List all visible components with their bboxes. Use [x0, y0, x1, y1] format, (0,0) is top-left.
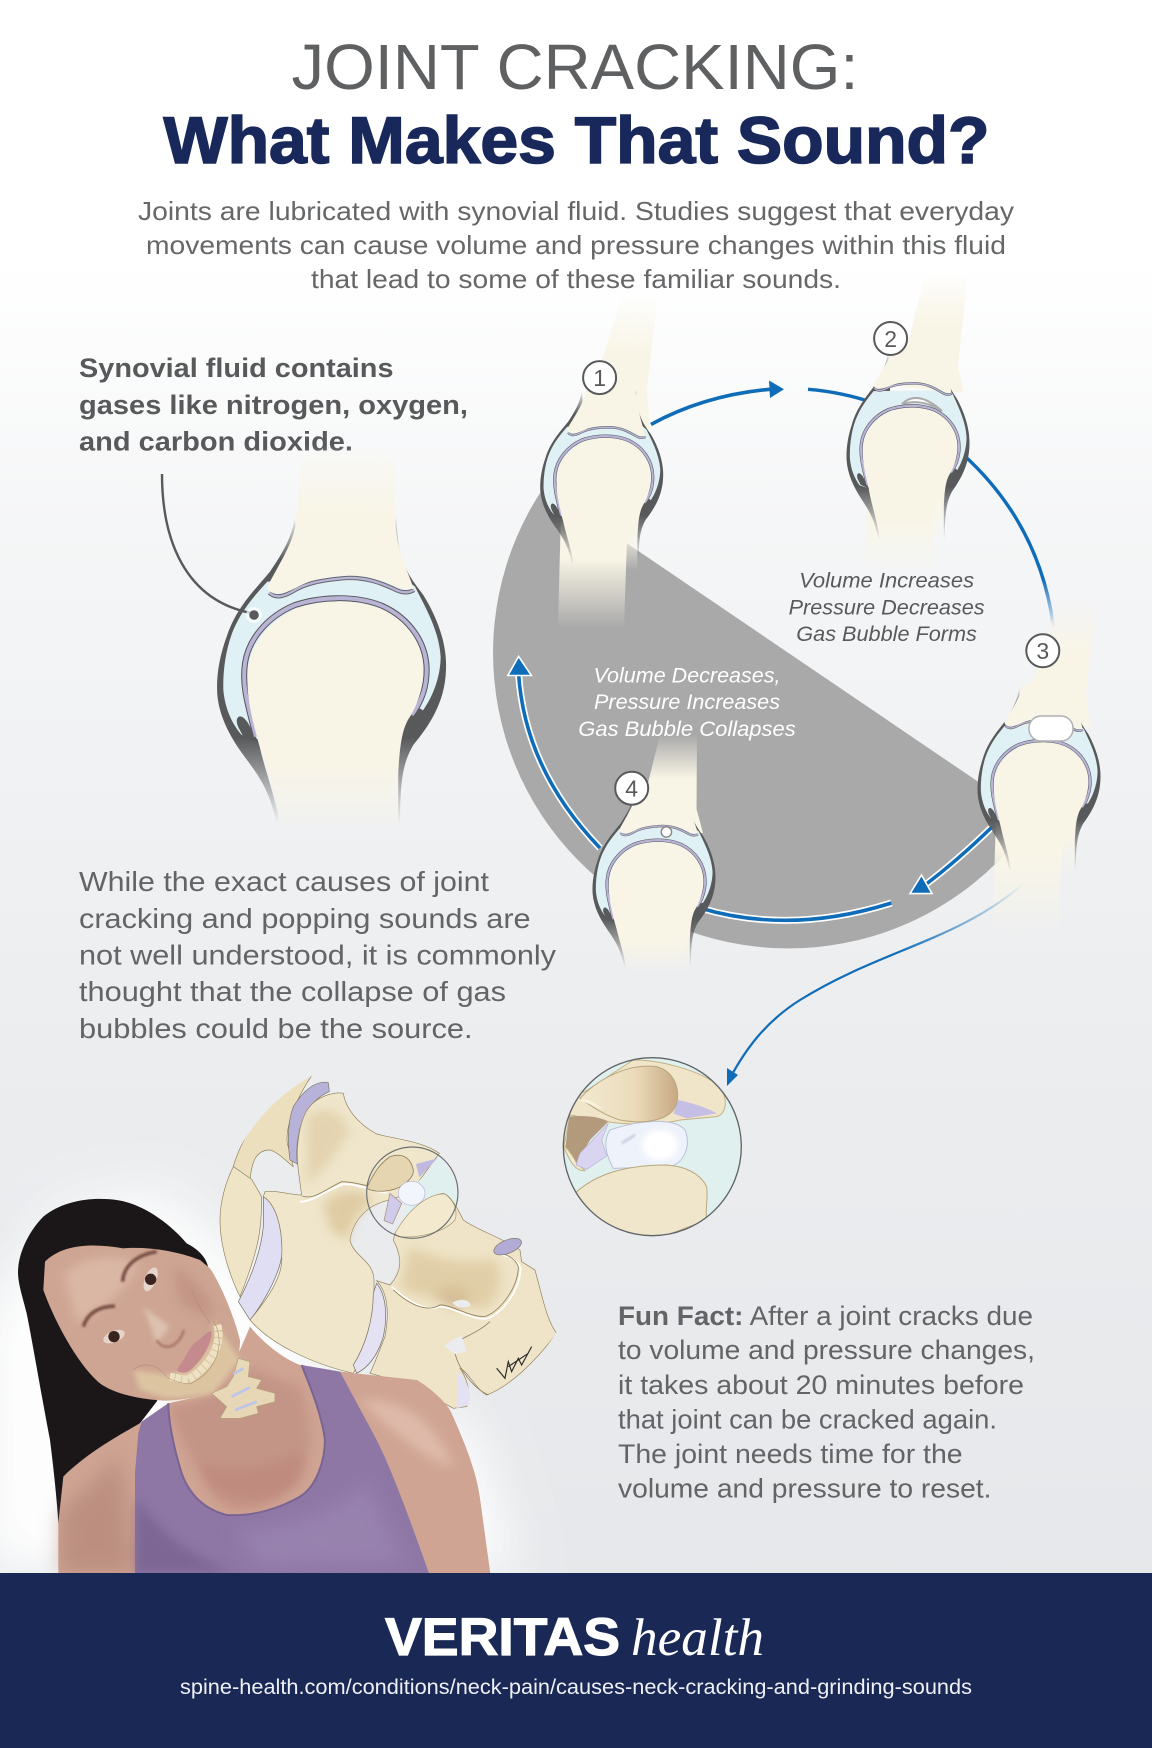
fun fact: Fun Fact: After a joint cracks due: [618, 1301, 1033, 1331]
artist signature: [497, 1347, 532, 1378]
cervical vertebrae: [212, 1358, 275, 1418]
explanation paragraph: While the exact causes of joint: [79, 866, 489, 897]
eyebrows: [83, 1252, 157, 1327]
caption: volume decreases: Gas Bubble Collapses: [578, 718, 796, 741]
intro text: movements can cause volume and pressure changes within this fluid: [146, 230, 1006, 260]
caption: volume decreases: [578, 664, 796, 741]
caption: volume increases: [789, 570, 985, 646]
teeth: [170, 1325, 219, 1379]
arrow: 1 to 2: [651, 380, 784, 424]
title: [164, 31, 990, 177]
nose: [157, 1330, 184, 1347]
central vertebra: [250, 1093, 439, 1373]
step number 2: 2: [884, 326, 897, 352]
jaw bone overlay: [133, 1320, 240, 1398]
step number 3: [1026, 634, 1059, 667]
fun fact: that joint can be cracked again.: [618, 1404, 997, 1434]
fun fact: The joint needs time for the: [618, 1439, 963, 1469]
title: JOINT CRACKING:: [292, 31, 858, 103]
explanation paragraph: [79, 866, 556, 1044]
arrow: joint 3 to magnified view: [727, 883, 1024, 1086]
fun fact: volume and pressure to reset.: [618, 1474, 992, 1504]
step number 1: [583, 361, 616, 394]
explanation paragraph: cracking and popping sounds are: [79, 903, 531, 934]
synovial fluid heading: gases like nitrogen, oxygen,: [79, 390, 468, 420]
socket: [367, 1155, 413, 1191]
intro text: that lead to some of these familiar sounds.: [311, 264, 841, 294]
step number 2: [874, 322, 907, 355]
step number 1: 1: [593, 365, 606, 391]
logo: VERITAS: [385, 1608, 620, 1667]
hair: [18, 1199, 208, 1523]
caption: volume decreases: Pressure Increases: [594, 691, 781, 714]
disc 1: [288, 1082, 329, 1164]
title: What Makes That Sound?: [164, 103, 990, 177]
logo: health: [631, 1609, 764, 1667]
synovial fluid heading: Synovial fluid contains: [79, 353, 393, 383]
caption: volume decreases: Volume Decreases,: [594, 664, 780, 688]
explanation paragraph: thought that the collapse of gas: [79, 976, 506, 1007]
caption: volume increases: Pressure Decreases: [789, 596, 985, 620]
large joint diagram: [217, 445, 446, 833]
lips: [177, 1331, 212, 1373]
explanation paragraph: bubbles could be the source.: [79, 1013, 473, 1044]
right vertebra shading: [433, 1285, 473, 1308]
arrow: 2 to 3: [808, 389, 1054, 627]
disc 3: [353, 1283, 386, 1373]
joint 2: [846, 270, 970, 574]
step number 3: 3: [1036, 638, 1049, 664]
arrow: 3 to 4: [700, 827, 992, 920]
tank top: [135, 1365, 429, 1573]
body skin: [58, 1327, 490, 1573]
upper facet in ring: [395, 1194, 456, 1237]
grey cycle semicircle: [493, 487, 1033, 948]
disc 5: [457, 1372, 470, 1408]
fun fact: [618, 1301, 1035, 1504]
arrow: 4 to 1: [508, 656, 600, 848]
left column bone: [220, 1167, 262, 1297]
intro text: [138, 196, 1014, 294]
disc 4: [494, 1238, 522, 1256]
intro text: Joints are lubricated with synovial fluid. Studies suggest that everyday: [138, 196, 1014, 226]
woman with neck x-ray: [0, 1180, 490, 1573]
disc 2: [238, 1197, 282, 1320]
right vertebra: [370, 1193, 557, 1408]
eyes: [101, 1265, 161, 1346]
caption: volume increases: Gas Bubble Forms: [796, 623, 977, 646]
fun fact: it takes about 20 minutes before: [618, 1370, 1024, 1400]
logo: [385, 1608, 764, 1667]
joint 4: [592, 735, 716, 974]
source url: spine-health.com/conditions/neck-pain/causes-neck-cracking-and-grinding-sounds: [180, 1676, 972, 1699]
magnified joint illustration: [553, 1058, 741, 1242]
leader line: [162, 474, 262, 623]
fun fact: to volume and pressure changes,: [618, 1335, 1035, 1365]
joint 3: [977, 600, 1101, 938]
glow behind woman: [0, 1190, 520, 1573]
step number 4: [615, 772, 648, 805]
foramina: [452, 1300, 471, 1307]
synovial fluid heading: and carbon dioxide.: [79, 426, 353, 456]
caption: volume increases: Volume Increases: [799, 570, 975, 593]
step number 4: 4: [625, 776, 638, 802]
footer band: [0, 1573, 1152, 1748]
face: [43, 1245, 240, 1401]
joint 1: [540, 295, 663, 628]
neck and chest shading: [168, 1367, 310, 1500]
fluid wedge: [403, 1158, 458, 1217]
synovial fluid heading: [79, 353, 468, 456]
left arch bone: [233, 1073, 313, 1180]
explanation paragraph: not well understood, it is commonly: [79, 940, 556, 971]
spine illustration: [220, 1073, 557, 1408]
central vertebra shading: [323, 1190, 373, 1240]
